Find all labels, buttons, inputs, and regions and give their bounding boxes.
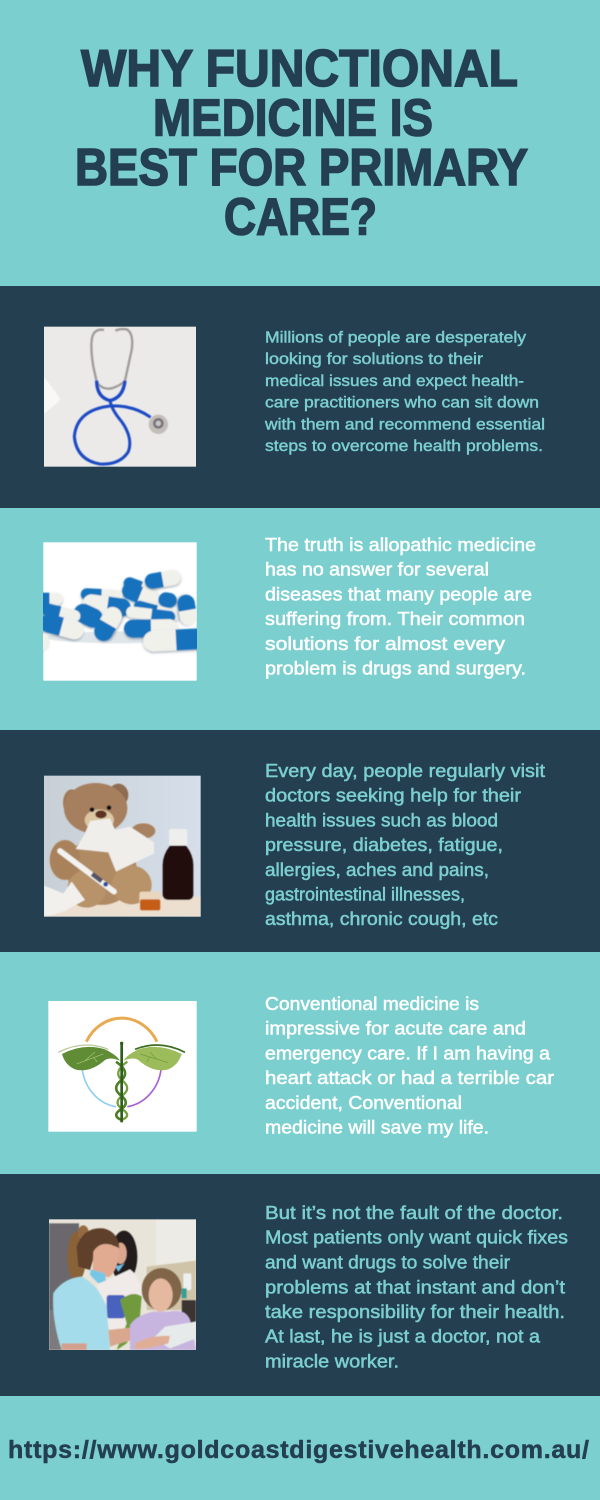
text: the truth: suffering from. Their common xyxy=(265,609,525,629)
text: millions of people: Millions of people are desperately xyxy=(265,330,526,346)
text: conventional medicine: emergency care. If I am having a xyxy=(265,1043,551,1063)
text: the truth: has no answer for several xyxy=(265,560,489,580)
text: millions of people: steps to overcome health problems. xyxy=(265,438,543,455)
text: conventional medicine: heart attack or had a terrible car xyxy=(265,1068,554,1088)
title: CARE? xyxy=(224,188,377,246)
text: every day xyxy=(265,761,545,929)
text: the truth xyxy=(265,535,536,678)
text: every day: pressure, diabetes, fatigue, xyxy=(265,835,503,855)
text: millions of people: looking for solutions to their xyxy=(265,351,484,368)
text: conventional medicine: accident, Conventional xyxy=(265,1093,462,1113)
text: not the fault of the doctor xyxy=(265,1203,568,1371)
text: not the fault of the doctor: miracle worker. xyxy=(265,1351,399,1371)
text: every day: allergies, aches and pains, xyxy=(265,860,489,880)
text: the truth: solutions for almost every xyxy=(265,634,505,654)
text: conventional medicine: impressive for acute care and xyxy=(265,1019,526,1039)
panel: everyday health issues xyxy=(0,730,600,952)
footer url: https://www.goldcoastdigestivehealth.com.au/ xyxy=(8,1436,589,1464)
image: nurses showing tablet to patient xyxy=(49,1219,196,1350)
text: the truth: The truth is allopathic medicine xyxy=(265,535,536,555)
panel: millions seek solutions xyxy=(0,286,600,508)
text: every day: asthma, chronic cough, etc xyxy=(265,909,498,929)
image: sick teddy bear with medicine xyxy=(44,776,201,917)
image: caduceus with leaves logo xyxy=(48,1001,197,1132)
text: millions of people: medical issues and expect health- xyxy=(265,373,524,390)
title xyxy=(75,40,528,246)
title: WHY FUNCTIONAL xyxy=(81,40,518,98)
text: not the fault of the doctor: But it’s not the fault of the doctor. xyxy=(265,1203,563,1223)
text: conventional medicine xyxy=(265,994,554,1138)
panel: not the doctor's fault xyxy=(0,1174,600,1396)
title: BEST FOR PRIMARY xyxy=(75,139,528,197)
text: conventional medicine: medicine will save my life. xyxy=(265,1118,489,1138)
text: every day: health issues such as blood xyxy=(265,810,498,830)
text: every day: gastrointestinal illnesses, xyxy=(265,884,465,904)
text: conventional medicine: Conventional medicine is xyxy=(265,994,479,1014)
text: every day: doctors seeking help for their xyxy=(265,786,521,806)
text: every day: Every day, people regularly visit xyxy=(265,761,545,781)
text: not the fault of the doctor: take responsibility for their health. xyxy=(265,1302,565,1322)
text: not the fault of the doctor: and want drugs to solve their xyxy=(265,1252,510,1272)
title: MEDICINE IS xyxy=(153,89,433,147)
image: blue and white capsules xyxy=(36,542,207,681)
panel: allopathic medicine xyxy=(0,508,600,730)
image: stethoscope xyxy=(44,327,196,467)
text: the truth: problem is drugs and surgery. xyxy=(265,658,526,678)
text: not the fault of the doctor: Most patients only want quick fixes xyxy=(265,1228,568,1248)
text: millions of people: with them and recommend essential xyxy=(264,416,545,433)
text: not the fault of the doctor: problems at that instant and don’t xyxy=(265,1277,565,1297)
text: millions of people xyxy=(264,330,545,455)
text: millions of people: care practitioners who can sit down xyxy=(265,395,539,412)
panel: conventional medicine xyxy=(0,952,600,1174)
text: the truth: diseases that many people are xyxy=(265,584,532,604)
text: not the fault of the doctor: At last, he is just a doctor, not a xyxy=(265,1327,541,1347)
